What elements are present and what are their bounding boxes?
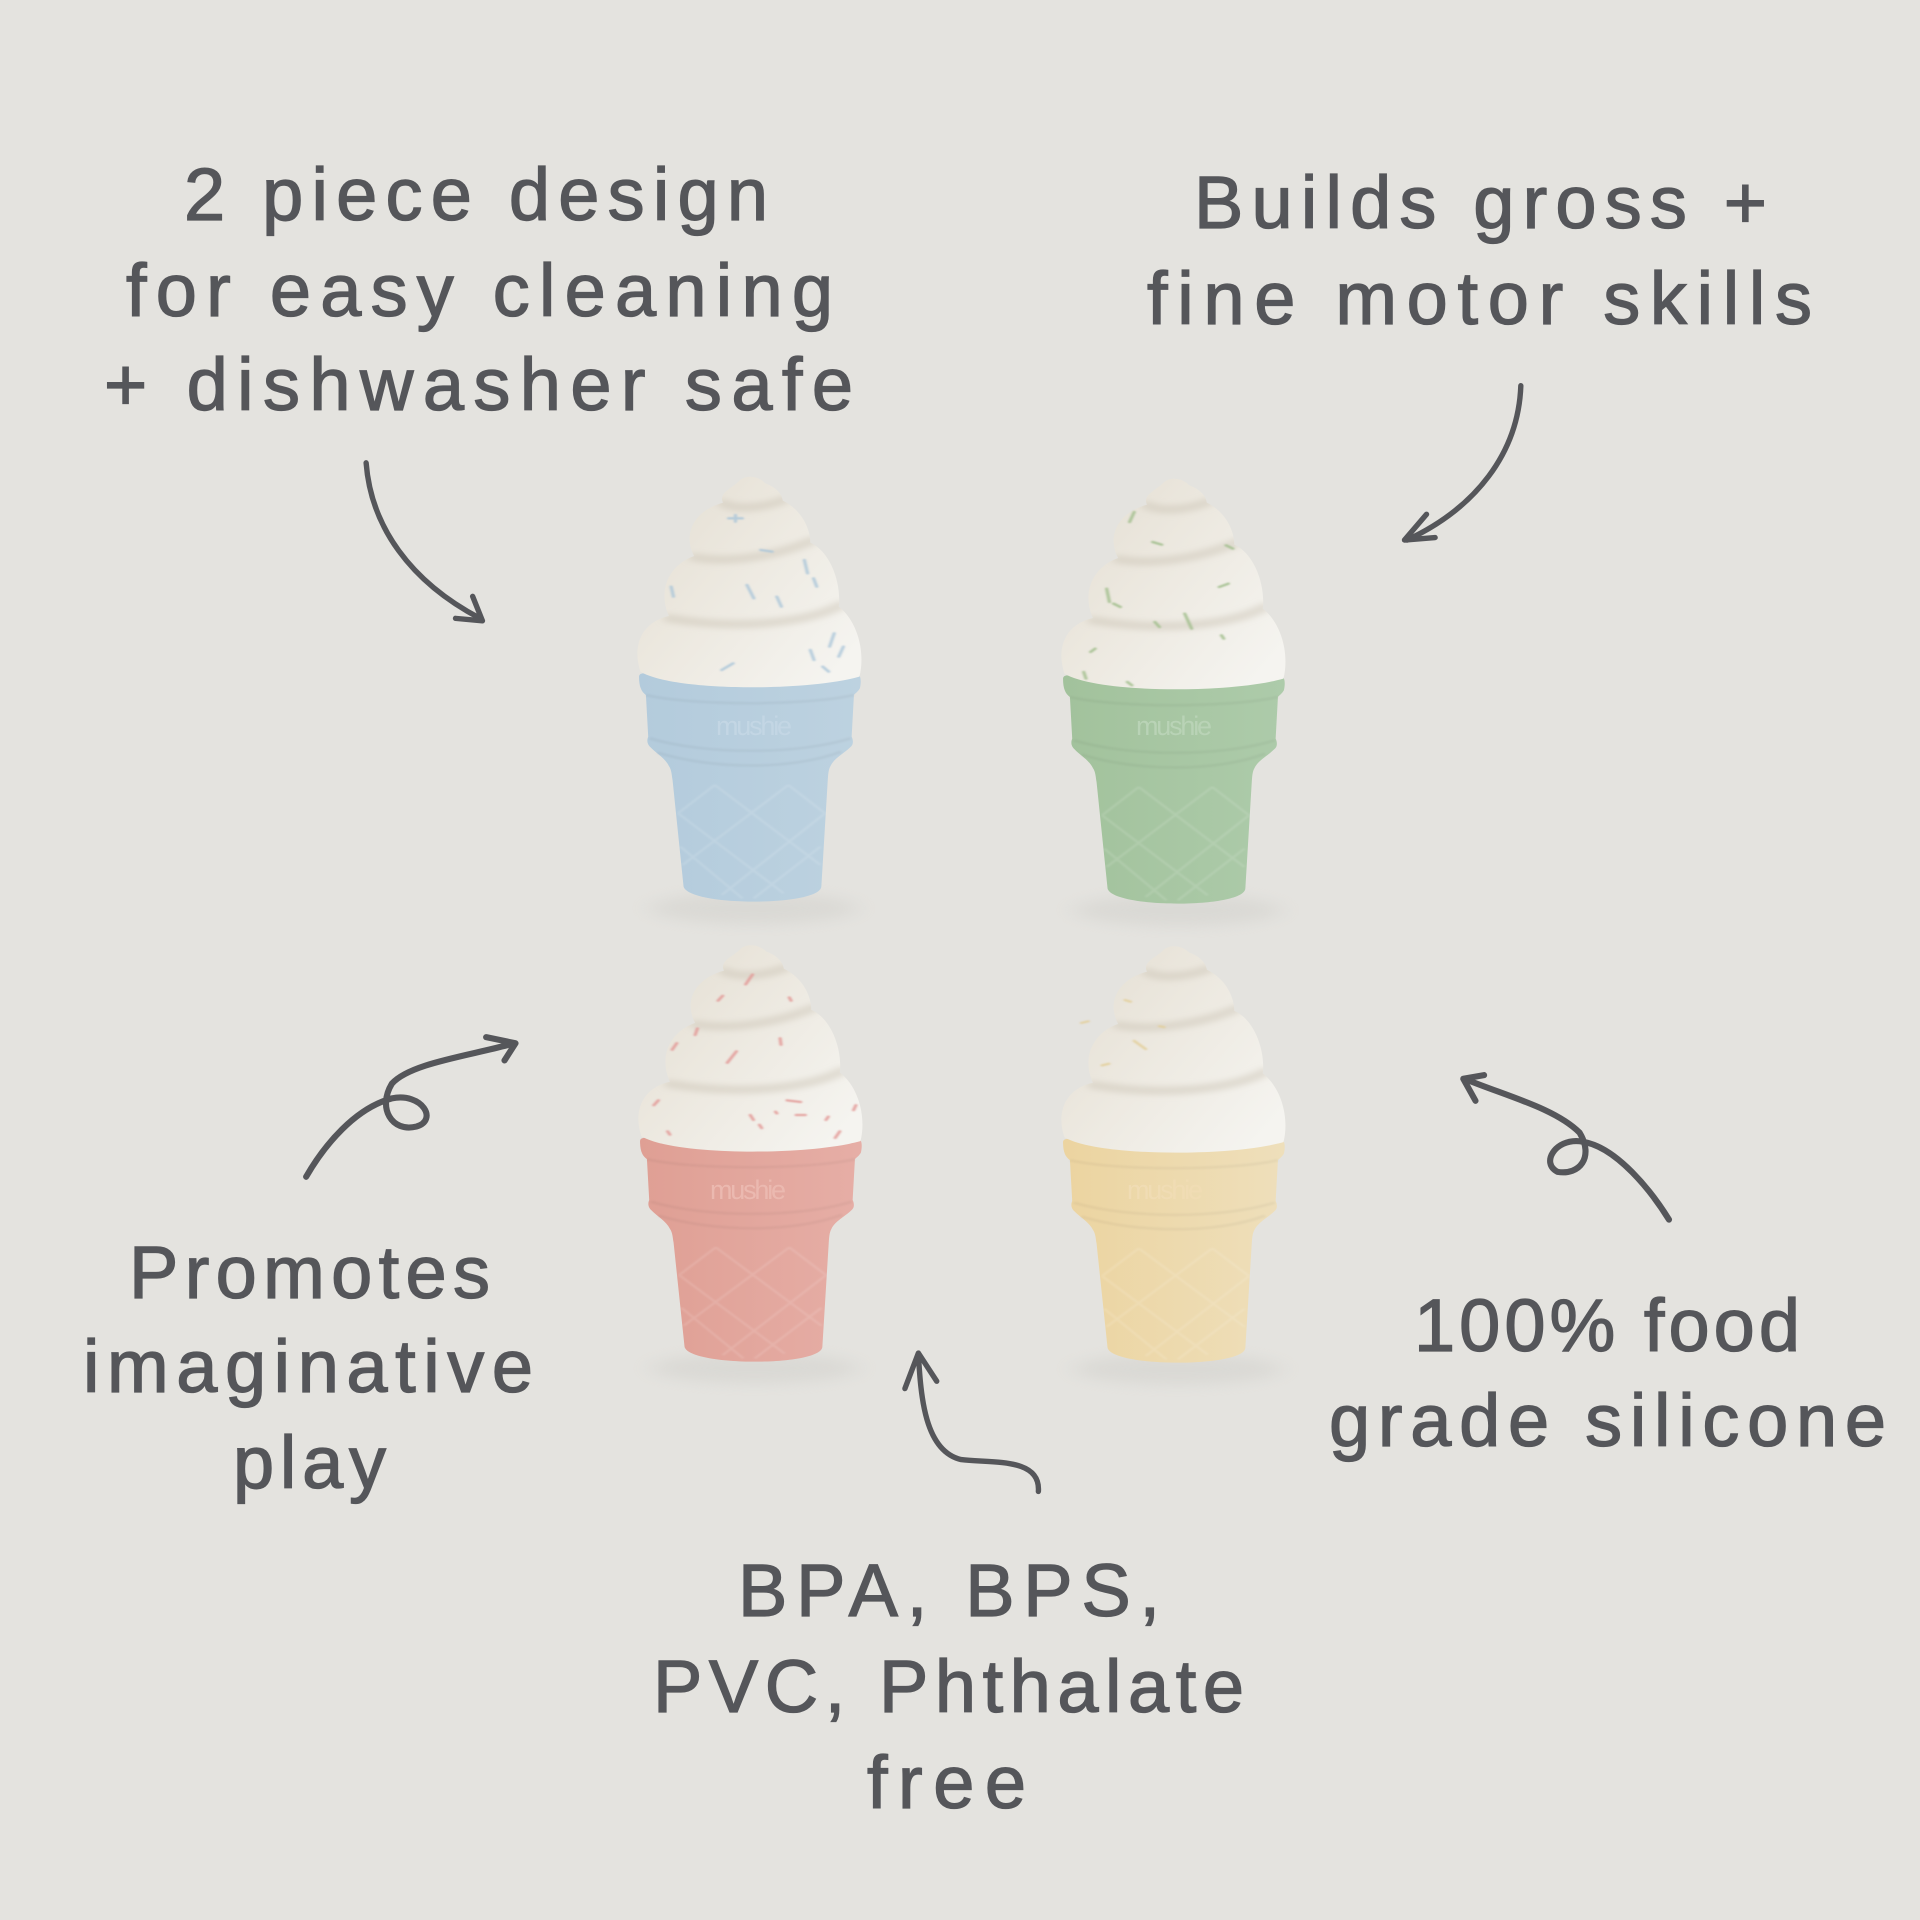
product: yellow ice cream cone xyxy=(1061,946,1285,1385)
callout: 2 piece design: + dishwasher safe xyxy=(104,343,853,426)
arrow: from 2 piece design to blue cone xyxy=(366,463,482,621)
callout: imaginative play: play xyxy=(233,1421,386,1504)
callout: motor skills xyxy=(1147,161,1812,340)
arrow: looped from food grade silicone to yellow cone xyxy=(1463,1075,1669,1220)
callout: food grade silicone: 100% food xyxy=(1414,1284,1800,1367)
callout: imaginative play xyxy=(83,1231,533,1504)
arrow: from motor skills to green cone xyxy=(1405,386,1521,540)
product: blue ice cream cone xyxy=(637,477,861,924)
callout: imaginative play: imaginative xyxy=(83,1325,533,1408)
arrow: looped from imaginative play to pink cone xyxy=(306,1037,516,1177)
product: pink ice cream cone xyxy=(638,945,862,1384)
product: blue ice cream cone: mushie xyxy=(716,711,792,741)
product: green ice cream cone xyxy=(1061,479,1285,926)
callout: 2 piece design: 2 piece design xyxy=(184,153,768,236)
product: pink ice cream cone: mushie xyxy=(710,1175,786,1205)
product: yellow ice cream cone: mushie xyxy=(1127,1175,1203,1205)
callout: food grade silicone xyxy=(1329,1284,1886,1462)
callout: food grade silicone: grade silicone xyxy=(1329,1379,1886,1462)
callout: 2 piece design xyxy=(104,153,853,426)
callout: motor skills: Builds gross + xyxy=(1194,161,1767,244)
callout: BPA free: free xyxy=(867,1741,1026,1824)
callout: BPA free: PVC, Phthalate xyxy=(653,1645,1244,1728)
callout: BPA free: BPA, BPS, xyxy=(738,1549,1160,1632)
callout: BPA free xyxy=(653,1549,1244,1824)
callout: 2 piece design: for easy cleaning xyxy=(126,249,833,332)
callout: imaginative play: Promotes xyxy=(129,1231,490,1314)
arrow: from BPA free up to pink cone xyxy=(905,1353,1038,1491)
callout: motor skills: fine motor skills xyxy=(1147,257,1812,340)
product: green ice cream cone: mushie xyxy=(1136,711,1212,741)
